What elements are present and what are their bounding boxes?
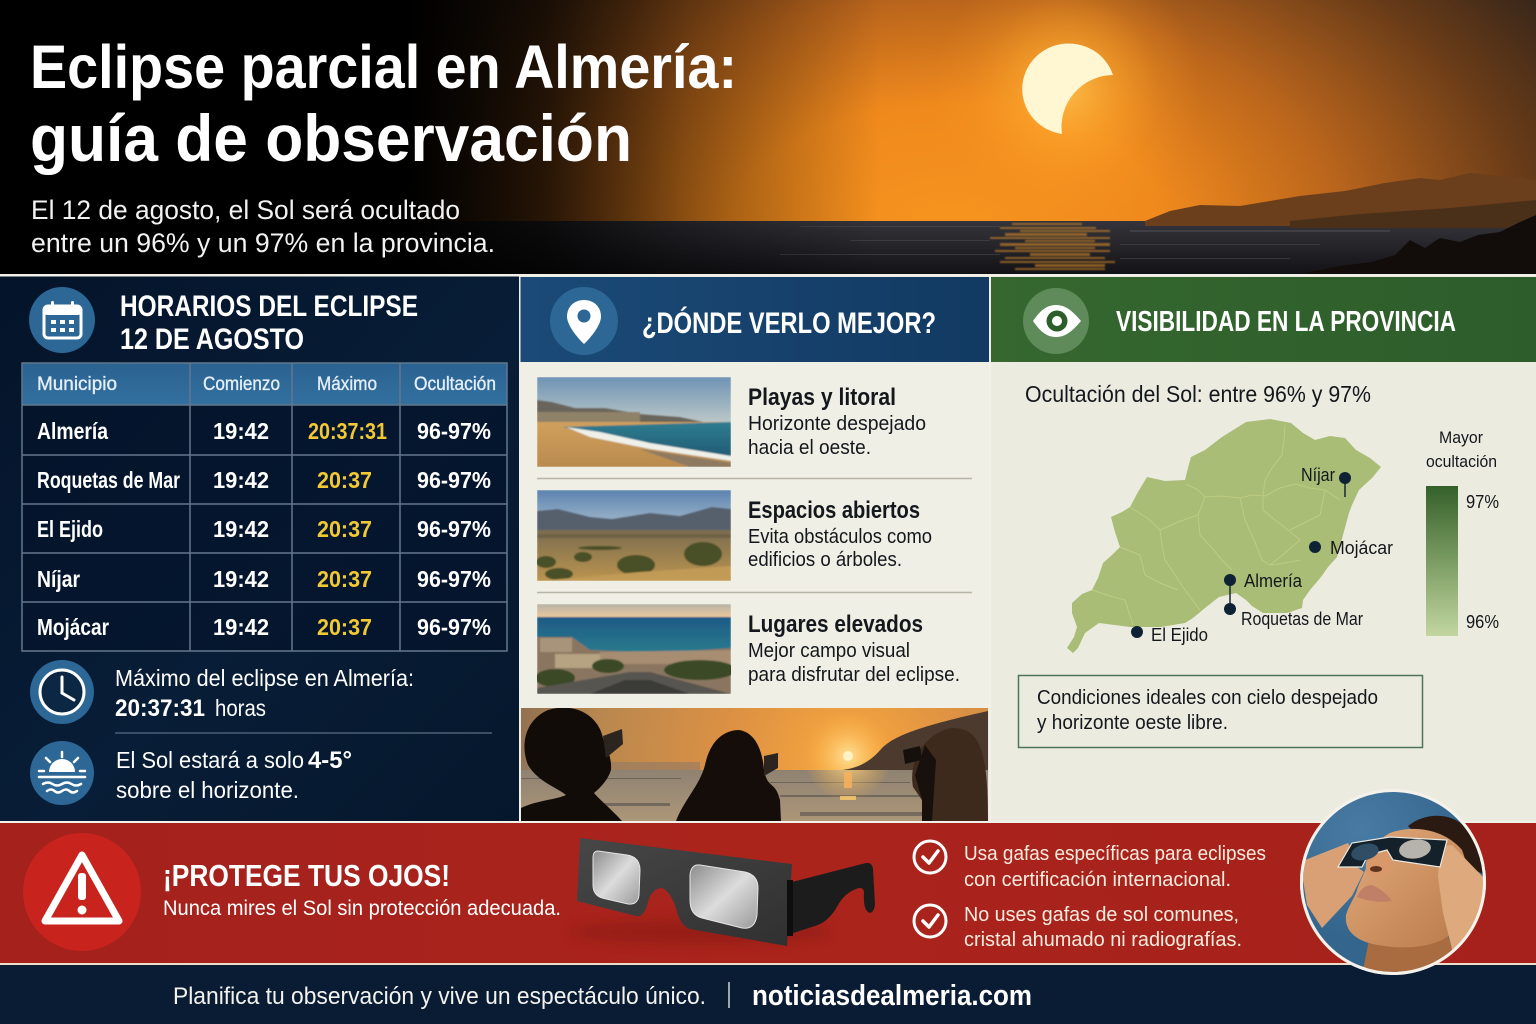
- table header: Comienzo: [203, 374, 280, 395]
- icon: sun over water: [30, 741, 94, 805]
- text: lugares elevados: Lugares elevados: [748, 611, 923, 638]
- text: lugares elevados: para disfrutar del eclipse.: [748, 664, 960, 686]
- panel: horarios: [0, 276, 519, 821]
- table rows: 19:42: [213, 418, 269, 444]
- callout: condiciones ideales: Condiciones ideales con cielo despejado: [1037, 687, 1378, 709]
- photo: mujer con gafas de eclipse: [1300, 789, 1486, 975]
- text: no uses gafas de sol: cristal ahumado ni radiografías.: [964, 929, 1242, 951]
- icon: warning: [23, 833, 141, 951]
- table rows: 20:37: [317, 614, 372, 640]
- map labels: [1151, 465, 1393, 645]
- footer band: [0, 965, 1536, 1024]
- checklist: recomendaciones: [914, 841, 1266, 951]
- text: no uses gafas de sol: No uses gafas de sol comunes,: [964, 904, 1239, 926]
- table rows: Níjar: [37, 566, 80, 592]
- photo: playa: [537, 377, 731, 467]
- table rows: 96-97%: [417, 467, 491, 493]
- map labels: Níjar: [1301, 465, 1335, 485]
- table rows: 20:37: [317, 516, 372, 542]
- text: gafas específicas: Usa gafas específicas para eclipses: [964, 843, 1266, 865]
- legend: mayor ocultación: 96%: [1466, 612, 1499, 632]
- text: máximo del eclipse: horas: [215, 695, 266, 721]
- lips: [1357, 885, 1392, 902]
- legend: mayor ocultación: ocultación: [1426, 452, 1497, 471]
- map: provincia de Almería: [1067, 419, 1393, 653]
- text: no uses gafas de sol: [964, 904, 1242, 951]
- table rows: [37, 418, 491, 640]
- glasses: [1338, 837, 1447, 867]
- text: altura del sol: sobre el horizonte.: [116, 777, 299, 803]
- title: Eclipse parcial en Almería:: [30, 33, 737, 101]
- heading: horarios: HORARIOS DEL ECLIPSE: [120, 290, 418, 323]
- callout: condiciones ideales: [1018, 676, 1422, 748]
- illustration: silueta derecha: [903, 728, 988, 821]
- table rows: 19:42: [213, 614, 269, 640]
- subtitle: El 12 de agosto, el Sol será ocultado: [31, 195, 460, 225]
- illustration: silueta izquierda: [521, 708, 623, 821]
- map labels: El Ejido: [1151, 625, 1208, 645]
- icon: calendar: [29, 287, 95, 353]
- table rows: 96-97%: [417, 516, 491, 542]
- text: planifica: Planifica tu observación y vive un espectáculo único.: [173, 983, 706, 1010]
- text: lugares elevados: [748, 611, 960, 686]
- illustration: silueta central: [676, 730, 781, 821]
- legend: mayor ocultación: 97%: [1466, 492, 1499, 512]
- illustration: coastal vegetation silhouette: [1300, 215, 1536, 274]
- illustration: hills on the horizon: [1145, 173, 1536, 228]
- left hand: [1303, 843, 1364, 928]
- text: playas y litoral: hacia el oeste.: [748, 437, 871, 459]
- title: [30, 33, 737, 175]
- panel: protege tus ojos: [0, 789, 1536, 975]
- table rows: 19:42: [213, 566, 269, 592]
- table rows: 96-97%: [417, 418, 491, 444]
- text: playas y litoral: [748, 384, 926, 459]
- table rows: 20:37: [317, 566, 372, 592]
- photo: lugares elevados: [535, 604, 736, 694]
- text: espacios abiertos: Evita obstáculos como: [748, 526, 932, 548]
- text: playas y litoral: Horizonte despejado: [748, 413, 926, 435]
- text: altura del sol: El Sol estará a solo: [116, 747, 304, 773]
- subtitle: entre un 96% y un 97% en la provincia.: [31, 228, 495, 258]
- heading: horarios: 12 DE AGOSTO: [120, 323, 304, 356]
- panel: dónde verlo mejor: [520, 277, 989, 821]
- text: altura del sol: 4-5°: [308, 747, 352, 774]
- neck: [1364, 936, 1452, 972]
- table header: Ocultación: [414, 374, 496, 395]
- table: horarios por municipio: [22, 363, 507, 651]
- icon: clock: [30, 660, 94, 724]
- text: espacios abiertos: Espacios abiertos: [748, 497, 920, 524]
- map markers: [1131, 472, 1351, 638]
- text: web: noticiasdealmeria.com: [752, 980, 1032, 1012]
- table rows: 96-97%: [417, 566, 491, 592]
- map labels: Mojácar: [1330, 538, 1393, 558]
- subtitle: [31, 195, 495, 258]
- text: playas y litoral: Playas y litoral: [748, 384, 896, 411]
- illustration: sol poniente: [809, 724, 887, 800]
- table rows: El Ejido: [37, 516, 103, 542]
- text: máximo del eclipse: 20:37:31: [115, 695, 205, 722]
- table rows: Almería: [37, 418, 108, 444]
- icon: eye: [1023, 288, 1089, 354]
- callout: condiciones ideales: y horizonte oeste libre.: [1037, 712, 1228, 734]
- table rows: 20:37: [317, 467, 372, 493]
- heading: dónde verlo mejor: ¿DÓNDE VERLO MEJOR?: [642, 306, 936, 340]
- text: máximo del eclipse: [115, 665, 414, 722]
- table rows: 96-97%: [417, 614, 491, 640]
- text: nunca mires el sol: Nunca mires el Sol sin protección adecuada.: [163, 897, 561, 920]
- text: altura del sol: [116, 747, 352, 803]
- illustration: eclipsed sun: [1022, 43, 1113, 134]
- heading: protege tus ojos: ¡PROTEGE TUS OJOS!: [163, 858, 450, 893]
- table header: Municipio: [37, 374, 117, 395]
- right hand: [1438, 845, 1483, 953]
- illustration: sea texture and sun reflection: [780, 223, 1390, 270]
- illustration: solar glasses: [570, 838, 875, 946]
- text: gafas específicas: con certificación internacional.: [964, 869, 1231, 891]
- table rows: 19:42: [213, 516, 269, 542]
- map labels: Roquetas de Mar: [1241, 609, 1363, 629]
- photo: personas observando el eclipse en la playa: [521, 708, 988, 821]
- text: gafas específicas: [964, 843, 1266, 891]
- text: máximo del eclipse: Máximo del eclipse en Almería:: [115, 665, 414, 691]
- icon: check 1: [914, 841, 946, 873]
- text: lugares elevados: Mejor campo visual: [748, 640, 910, 662]
- legend: mayor ocultación: Mayor: [1439, 428, 1483, 447]
- heading: horarios: [120, 290, 418, 356]
- panel: visibilidad en la provincia: [991, 277, 1536, 822]
- table rows: Mojácar: [37, 614, 109, 640]
- icon: check 2: [914, 905, 946, 937]
- nose: [1366, 859, 1368, 869]
- text: ocultación del sol: Ocultación del Sol: entre 96% y 97%: [1025, 381, 1371, 407]
- table header: [37, 374, 496, 395]
- text: espacios abiertos: [748, 497, 932, 571]
- face: [1346, 829, 1468, 947]
- hero banner: [0, 0, 1536, 274]
- illustration: acantilado: [842, 711, 988, 770]
- table rows: 20:37:31: [308, 418, 387, 444]
- table rows: 19:42: [213, 467, 269, 493]
- photo: espacios abiertos: [536, 490, 731, 581]
- hair: [1408, 816, 1486, 875]
- legend: mayor ocultación: [1426, 428, 1499, 636]
- table rows: Roquetas de Mar: [37, 467, 180, 493]
- map labels: Almería: [1244, 571, 1303, 591]
- text: espacios abiertos: edificios o árboles.: [748, 549, 902, 571]
- icon: location pin: [550, 287, 618, 355]
- table header: Máximo: [317, 374, 377, 395]
- panel dividers: [0, 274, 1536, 822]
- title: guía de observación: [30, 101, 632, 175]
